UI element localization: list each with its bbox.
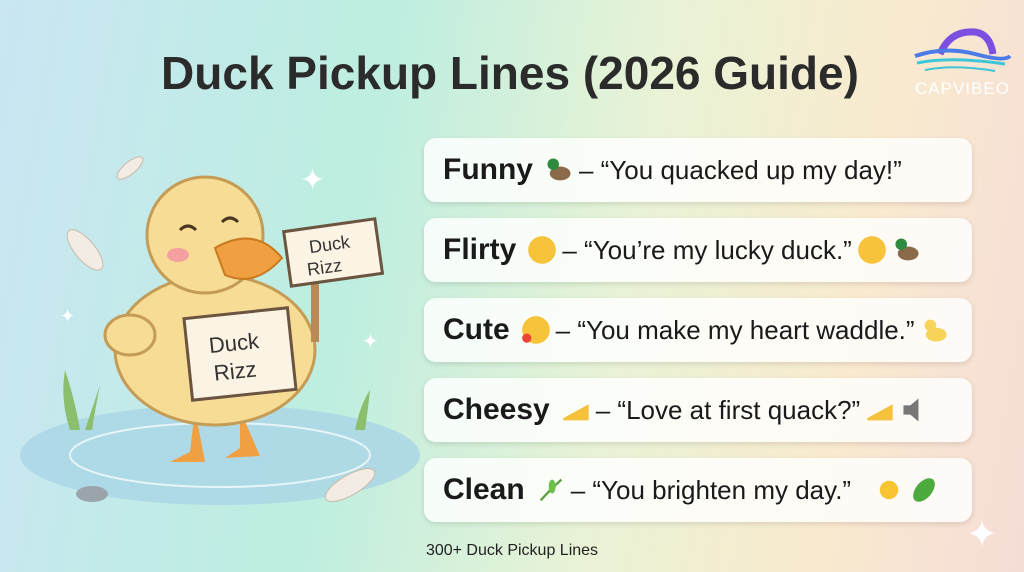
duck illustration: Duck (208, 328, 261, 358)
duck illustration: ✦ (60, 306, 75, 326)
card: funny: Funny (443, 153, 533, 186)
card: flirty (424, 218, 972, 282)
duck illustration: Rizz (306, 255, 343, 280)
title: Duck Pickup Lines (2026 Guide) (161, 47, 859, 99)
card: cute: Cute (443, 313, 510, 346)
body (115, 275, 315, 425)
card: clean: – “You brighten my day.” (571, 474, 851, 504)
logo (914, 28, 1012, 98)
card: funny: – “You quacked up my day!” (579, 154, 902, 184)
feathers (61, 224, 109, 276)
duck illustration (20, 156, 420, 505)
front sign (184, 308, 296, 400)
card: cheesy: Cheesy (443, 393, 550, 426)
sparkles: ✦ (300, 164, 325, 197)
sign on stick (311, 280, 319, 342)
head (147, 177, 263, 293)
card: flirty: Flirty (443, 233, 516, 266)
pond (20, 405, 420, 505)
duck illustration: ✦ (362, 331, 379, 353)
card: funny (424, 138, 972, 202)
card: cute: – “You make my heart waddle.” (556, 314, 915, 344)
card: cute (424, 298, 972, 362)
card: flirty: – “You’re my lucky duck.” (562, 234, 852, 264)
duck illustration: Rizz (213, 356, 258, 386)
logo: CAPVIBEO (915, 79, 1010, 98)
sparkle bottom right: ✦ (966, 514, 998, 556)
legs (170, 410, 260, 462)
duck illustration: Duck (308, 232, 352, 257)
reeds (63, 370, 100, 430)
card: cheesy (424, 378, 972, 442)
footer text: 300+ Duck Pickup Lines (426, 542, 598, 559)
card: clean: Clean (443, 473, 525, 506)
card: clean (424, 458, 972, 522)
card: cheesy: – “Love at first quack?” (596, 394, 860, 424)
